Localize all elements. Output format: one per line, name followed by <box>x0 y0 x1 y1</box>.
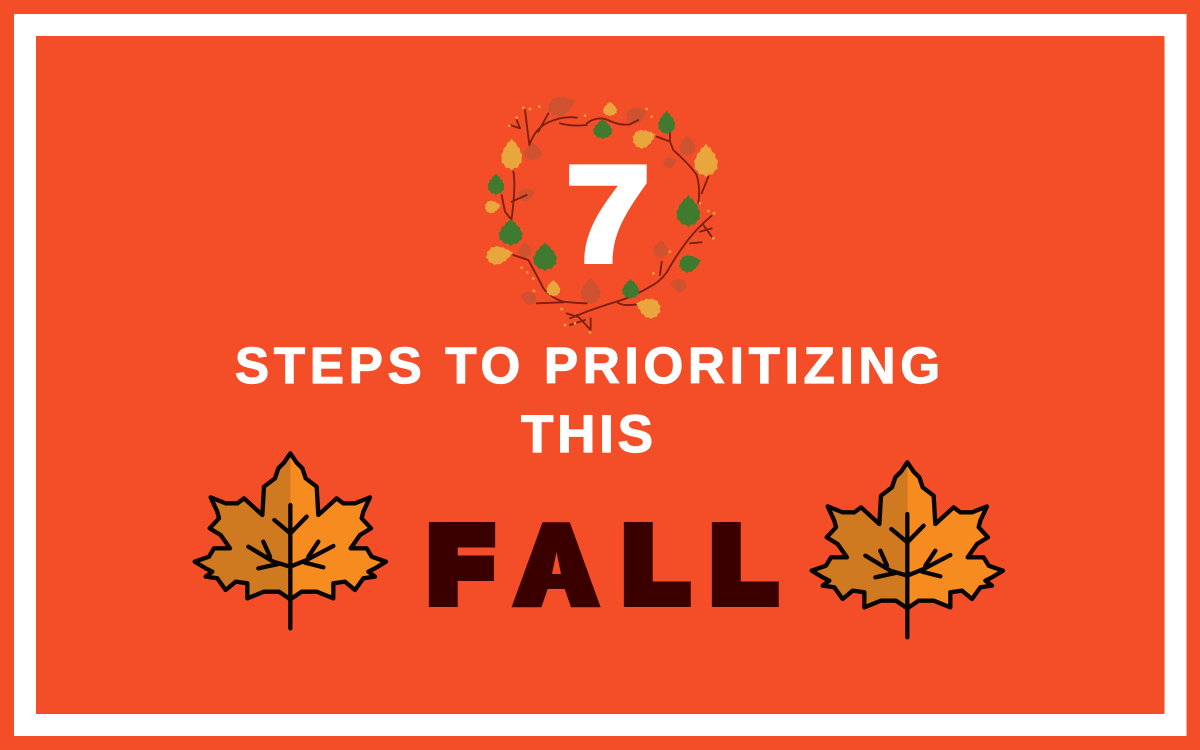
FALL word: FALL <box>429 507 775 622</box>
heading line 2: THIS <box>521 405 653 464</box>
number 7: 7 <box>566 138 650 290</box>
wreath with number 7 <box>483 91 718 334</box>
icon: left maple leaf <box>195 453 386 628</box>
heading line 1: STEPS TO PRIORITIZING <box>235 337 940 394</box>
berries <box>508 105 715 334</box>
wreath illustration <box>483 91 718 334</box>
faded red leaves <box>516 91 696 307</box>
yellow leaves <box>483 102 718 322</box>
icon: right maple leaf <box>812 462 1003 637</box>
branches <box>502 110 712 330</box>
green leaves <box>488 111 703 299</box>
